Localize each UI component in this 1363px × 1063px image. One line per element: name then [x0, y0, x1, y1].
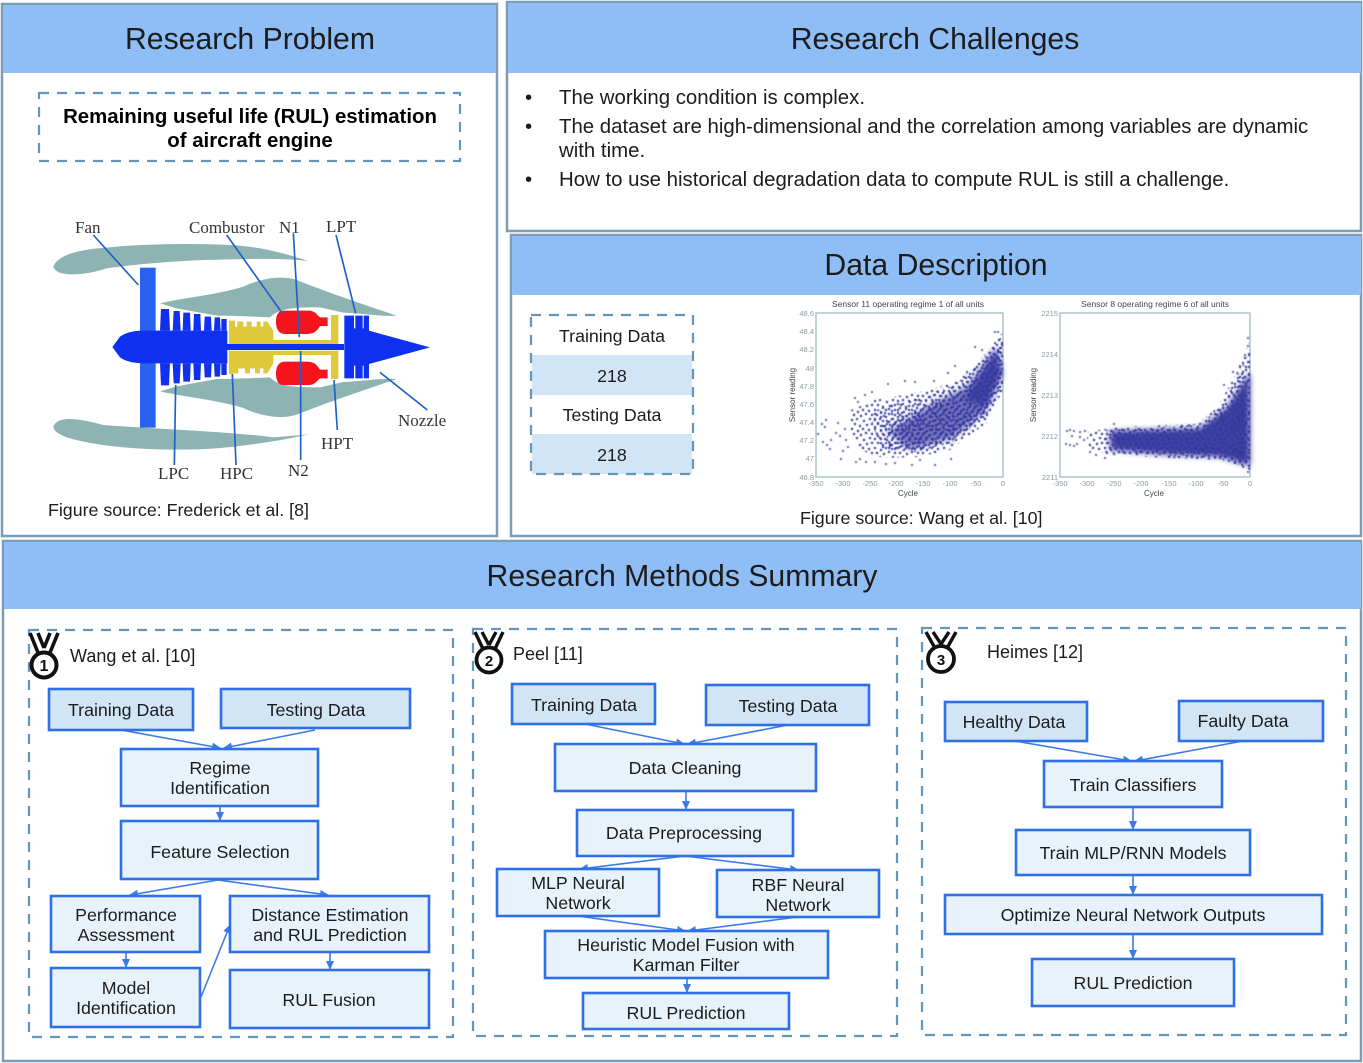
flowchart 1: RUL Fusion — [282, 990, 376, 1010]
heading: data description: Data Description — [824, 249, 1048, 282]
scatter plot: sensor 8: 2215 — [1041, 309, 1058, 318]
scatter plot: sensor 8: -200 — [1133, 479, 1149, 488]
scatter plot: sensor 8: -100 — [1188, 479, 1204, 488]
flowchart 3 — [945, 701, 1323, 1006]
flowchart 1: Identification — [170, 778, 270, 798]
figure source: Wang: Figure source: Wang et al. [10] — [800, 508, 1042, 528]
flowchart 1: Feature Selection — [150, 842, 290, 862]
scatter plot: sensor 8: 2214 — [1041, 350, 1058, 359]
method author: Heimes [12] — [987, 642, 1083, 662]
scatter plot: sensor 11: 0 — [1001, 479, 1005, 488]
scatter plot: sensor 11: -50 — [971, 479, 981, 488]
scatter plot: sensor 11: -200 — [888, 479, 904, 488]
engine diagram — [53, 217, 446, 483]
heading: research problem: Research Problem — [125, 23, 375, 56]
engine diagram: Fan — [75, 218, 101, 237]
data table — [531, 315, 693, 474]
flowchart 2: Training Data — [531, 695, 637, 715]
engine diagram: Nozzle — [398, 411, 446, 430]
panel: data description — [511, 235, 1361, 536]
method panel: Peel — [473, 629, 897, 1036]
heading: research challenges: Research Challenges — [791, 23, 1079, 56]
bullet list: The dataset are high-dimensional and the correlation among variables are dynamic — [559, 116, 1308, 138]
scatter plot: sensor 8: Sensor 8 operating regime 6 of all units — [1081, 299, 1229, 309]
engine diagram: Combustor — [189, 218, 265, 237]
flowchart 1 — [49, 689, 429, 1028]
bullet list: • — [525, 169, 532, 191]
panel: research problem — [2, 4, 497, 536]
data table: 218 — [597, 445, 627, 465]
bullet list: with time. — [558, 140, 645, 162]
flowchart 1: Performance — [75, 905, 177, 925]
data table: 218 — [597, 366, 627, 386]
flowchart 2: Heuristic Model Fusion with — [577, 935, 795, 955]
scatter plot: sensor 11: 47.4 — [799, 418, 814, 427]
scatter plot: sensor 11: 48 — [806, 364, 814, 373]
flowchart 1: Regime — [189, 758, 251, 778]
flowchart 1: and RUL Prediction — [253, 925, 407, 945]
engine diagram: HPC — [220, 464, 253, 483]
scatter plot: sensor 8: -300 — [1079, 479, 1095, 488]
scatter plot: sensor 11: 47.2 — [799, 436, 814, 445]
scatter plot: sensor 11: Sensor reading — [788, 368, 797, 422]
icon: medal 2: 2 — [485, 653, 493, 670]
scatter plot: sensor 11: 46.8 — [799, 473, 814, 482]
bullet list — [525, 87, 1308, 191]
flowchart 3: Optimize Neural Network Outputs — [1001, 905, 1266, 925]
scatter plot: sensor 8: 2212 — [1041, 432, 1058, 441]
scatter plot: sensor 11: 48.6 — [799, 309, 814, 318]
flowchart 1: Model — [102, 978, 150, 998]
flowchart 2 — [497, 684, 879, 1029]
panel: research challenges — [507, 2, 1361, 231]
bullet list: • — [525, 87, 532, 109]
scatter plot: sensor 8: 0 — [1248, 479, 1252, 488]
scatter plot: sensor 11: -350 — [808, 479, 824, 488]
scatter plot: sensor 8: 2211 — [1042, 473, 1058, 482]
scatter plot: sensor 11 — [788, 299, 1005, 498]
scatter plot: sensor 8: 2213 — [1041, 391, 1058, 400]
heading: research methods summary: Research Methods Summary — [487, 560, 878, 593]
engine diagram: LPC — [158, 464, 189, 483]
engine diagram: HPT — [321, 434, 354, 453]
callout: RUL estimation: Remaining useful life (RUL) estimation — [63, 106, 437, 128]
icon: medal 1 — [30, 633, 58, 678]
method author: Peel [11] — [513, 644, 583, 664]
icon: medal 1: 1 — [40, 658, 49, 675]
scatter plot: sensor 11: -100 — [942, 479, 958, 488]
icon: medal 2 — [475, 632, 503, 672]
flowchart 3: Faulty Data — [1198, 711, 1289, 731]
flowchart 2: RBF Neural — [752, 875, 844, 895]
scatter plot: sensor 8: -50 — [1218, 479, 1228, 488]
figure source: Frederick: Figure source: Frederick et al. [8] — [48, 500, 309, 520]
scatter plot: sensor 8: Cycle — [1144, 489, 1165, 498]
flowchart 1: Identification — [76, 998, 176, 1018]
callout: RUL estimation: of aircraft engine — [167, 130, 333, 152]
flowchart 3: Healthy Data — [963, 712, 1066, 732]
flowchart 3: Train Classifiers — [1070, 775, 1197, 795]
scatter plot: sensor 11: 47 — [806, 454, 814, 463]
flowchart 1: Training Data — [68, 700, 174, 720]
scatter plot: sensor 11: Sensor 11 operating regime 1 of all units — [832, 299, 984, 309]
flowchart 3: RUL Prediction — [1074, 973, 1192, 993]
scatter plot: sensor 8 — [1029, 299, 1252, 498]
bullet list: How to use historical degradation data to compute RUL is still a challenge. — [559, 169, 1229, 191]
icon: medal 3: 3 — [937, 652, 945, 669]
icon: medal 3 — [926, 632, 956, 672]
scatter plot: sensor 11: Cycle — [898, 489, 919, 498]
callout: RUL estimation — [39, 93, 460, 161]
scatter plot: sensor 8: -350 — [1052, 479, 1068, 488]
flowchart 1: Assessment — [78, 925, 174, 945]
scatter plot: sensor 8: -150 — [1161, 479, 1177, 488]
flowchart 1: Distance Estimation — [251, 905, 409, 925]
flowchart 2: Network — [545, 893, 611, 913]
scatter plot: sensor 8: -250 — [1106, 479, 1122, 488]
engine diagram: N2 — [288, 461, 309, 480]
data table: Testing Data — [563, 405, 662, 425]
flowchart 2: Karman Filter — [633, 955, 739, 975]
bullet list: The working condition is complex. — [559, 87, 865, 109]
engine diagram: N1 — [279, 218, 300, 237]
flowchart 2: Data Preprocessing — [606, 823, 762, 843]
scatter plot: sensor 11: -250 — [862, 479, 878, 488]
flowchart 2: Data Cleaning — [629, 758, 741, 778]
method author: Wang et al. [10] — [70, 646, 195, 666]
scatter plot: sensor 8: Sensor reading — [1029, 368, 1038, 422]
flowchart 2: Testing Data — [739, 696, 838, 716]
engine diagram: LPT — [326, 217, 357, 236]
panel: research methods summary — [3, 541, 1361, 1061]
bullet list: • — [525, 116, 532, 138]
data table: Training Data — [559, 326, 665, 346]
method panel: Wang et al. — [29, 630, 453, 1037]
scatter plot: sensor 11: 48.2 — [799, 345, 814, 354]
flowchart 1: Testing Data — [267, 700, 366, 720]
scatter plot: sensor 11: 47.6 — [799, 400, 814, 409]
flowchart 3: Train MLP/RNN Models — [1039, 843, 1227, 863]
scatter plot: sensor 11: -150 — [915, 479, 931, 488]
scatter plot: sensor 11: 48.4 — [799, 327, 814, 336]
flowchart 2: RUL Prediction — [627, 1003, 745, 1023]
flowchart 2: Network — [765, 895, 831, 915]
flowchart 2: MLP Neural — [531, 873, 625, 893]
scatter plot: sensor 11: -300 — [835, 479, 851, 488]
scatter plot: sensor 11: 47.8 — [799, 382, 814, 391]
method panel: Heimes — [922, 628, 1346, 1035]
